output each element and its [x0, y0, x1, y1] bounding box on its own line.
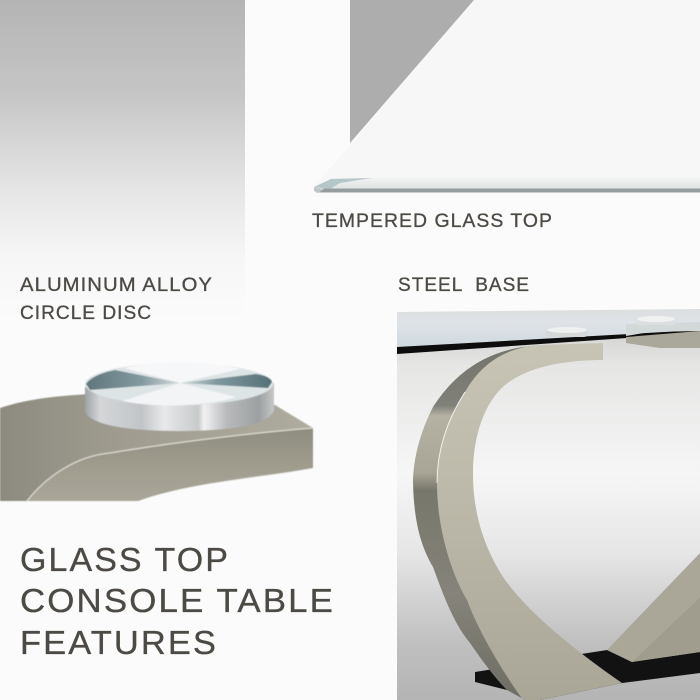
- curved steel front: [437, 343, 622, 700]
- label: tempered glass top: TEMPERED GLASS TOP: [312, 211, 553, 232]
- disc side: [85, 383, 274, 431]
- panel: left backdrop gradient: [0, 0, 245, 320]
- title: GLASS TOP: [20, 541, 230, 578]
- black foot base: [475, 668, 507, 690]
- panel: tempered glass photo: [314, 0, 700, 193]
- back right leg: [607, 553, 700, 662]
- title: FEATURES: [20, 624, 218, 661]
- label: steel base: STEEL BASE: [398, 275, 530, 296]
- steel arm: [0, 394, 313, 501]
- right arm bracket: [626, 331, 700, 348]
- title: [20, 541, 335, 661]
- title: CONSOLE TABLE: [20, 582, 335, 619]
- glass shelf: [397, 309, 700, 347]
- disc top: [85, 363, 273, 405]
- label: aluminum alloy circle disc: CIRCLE DISC: [20, 303, 152, 324]
- mounting disc right: [626, 316, 700, 336]
- curved steel side: [413, 346, 530, 700]
- photo: aluminum disc on steel arm: [0, 362, 313, 501]
- highlight along front edge: [437, 392, 465, 483]
- label: aluminum alloy circle disc: ALUMINUM ALLOY: [20, 275, 213, 296]
- photo: steel base of console table: [397, 309, 700, 700]
- label: aluminum alloy circle disc: [20, 275, 213, 324]
- room backdrop: [397, 312, 700, 700]
- mounting disc left: [546, 327, 588, 337]
